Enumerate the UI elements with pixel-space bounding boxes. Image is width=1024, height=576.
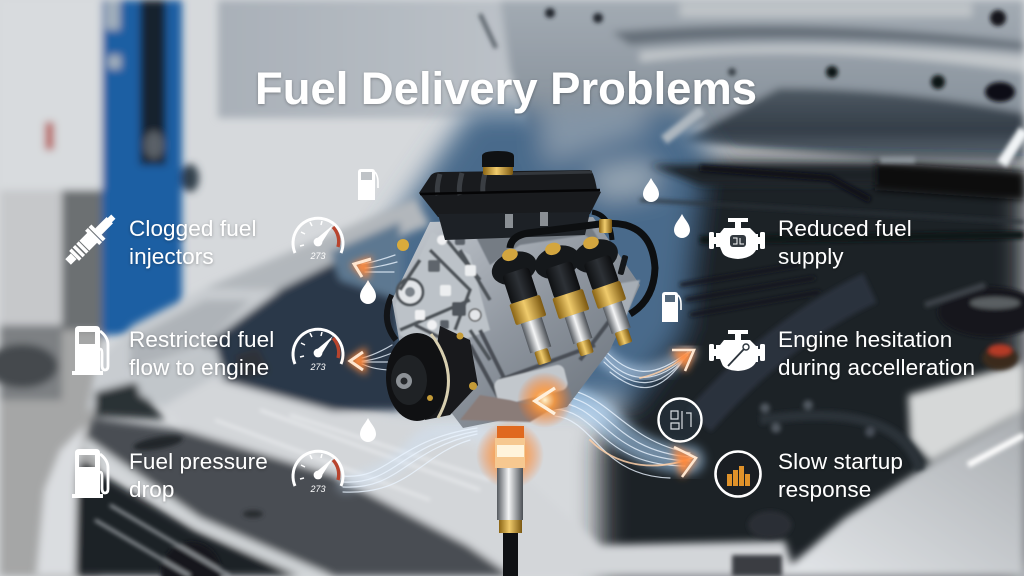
hood light panel [165, 378, 795, 576]
icon: gauge [293, 218, 343, 261]
floating icon: fuel pump small right [662, 292, 681, 322]
label: response [778, 477, 871, 502]
arrow: right lower [672, 446, 697, 478]
icon: spark plug [61, 210, 120, 269]
right item: slow startup response [716, 449, 903, 502]
arrow: right upper [671, 350, 695, 372]
floating icon: drop lower left [360, 418, 376, 442]
arrow: left upper [350, 256, 372, 280]
label: injectors [129, 244, 214, 269]
icon: fuel pump [72, 449, 108, 498]
right item: reduced fuel supply [709, 216, 912, 269]
engine block [392, 217, 640, 428]
windshield [679, 88, 1024, 160]
fuel rail and hose [510, 223, 655, 314]
label: Engine hesitation [778, 327, 952, 352]
icon: gauge [293, 329, 343, 372]
floating icon: drop top right [643, 178, 659, 202]
pulley [425, 326, 478, 420]
label: during accelleration [778, 355, 975, 380]
label: flow to engine [129, 355, 269, 380]
orange glow and spark plug [476, 372, 573, 576]
dark panel [87, 418, 512, 576]
icon: gauge [293, 451, 343, 494]
icon: dial with bars [716, 452, 760, 496]
arrow: center [535, 388, 555, 414]
label: Reduced fuel [778, 216, 912, 241]
rear hose [387, 295, 396, 340]
right item: engine hesitation [709, 327, 975, 380]
fuel tank cover [419, 170, 601, 217]
floating icon: circuit dial [658, 398, 702, 442]
injector 1 [486, 242, 567, 370]
title: Fuel Delivery Problems [255, 63, 757, 114]
icon: fuel pump [72, 326, 108, 375]
left item: restricted fuel flow [72, 326, 343, 380]
floating icon: drop right [674, 214, 690, 238]
injector 2 [529, 236, 609, 362]
hood underside [500, 0, 1024, 160]
left item: fuel pressure drop [72, 449, 343, 502]
label: Slow startup [778, 449, 903, 474]
label: Fuel pressure [129, 449, 268, 474]
label: supply [778, 244, 844, 269]
arrow: left middle [346, 347, 366, 375]
label: Clogged fuel [129, 216, 257, 241]
icon: engine [709, 218, 765, 259]
icon: engine [709, 330, 765, 371]
label: Restricted fuel [129, 327, 274, 352]
label: drop [129, 477, 174, 502]
grille [75, 460, 300, 576]
left fender and reflection [205, 198, 430, 292]
injector 3 [567, 230, 648, 351]
left item: clogged fuel injectors [61, 210, 343, 269]
main illustration: fuel pump engine [386, 151, 655, 428]
fuel flow wisps [343, 255, 692, 492]
floating icon: fuel pump small top [358, 169, 378, 200]
central blue and dark bay gradient [380, 105, 1024, 576]
right fender and tank [908, 362, 1024, 462]
floating icon: drop left [360, 280, 376, 304]
